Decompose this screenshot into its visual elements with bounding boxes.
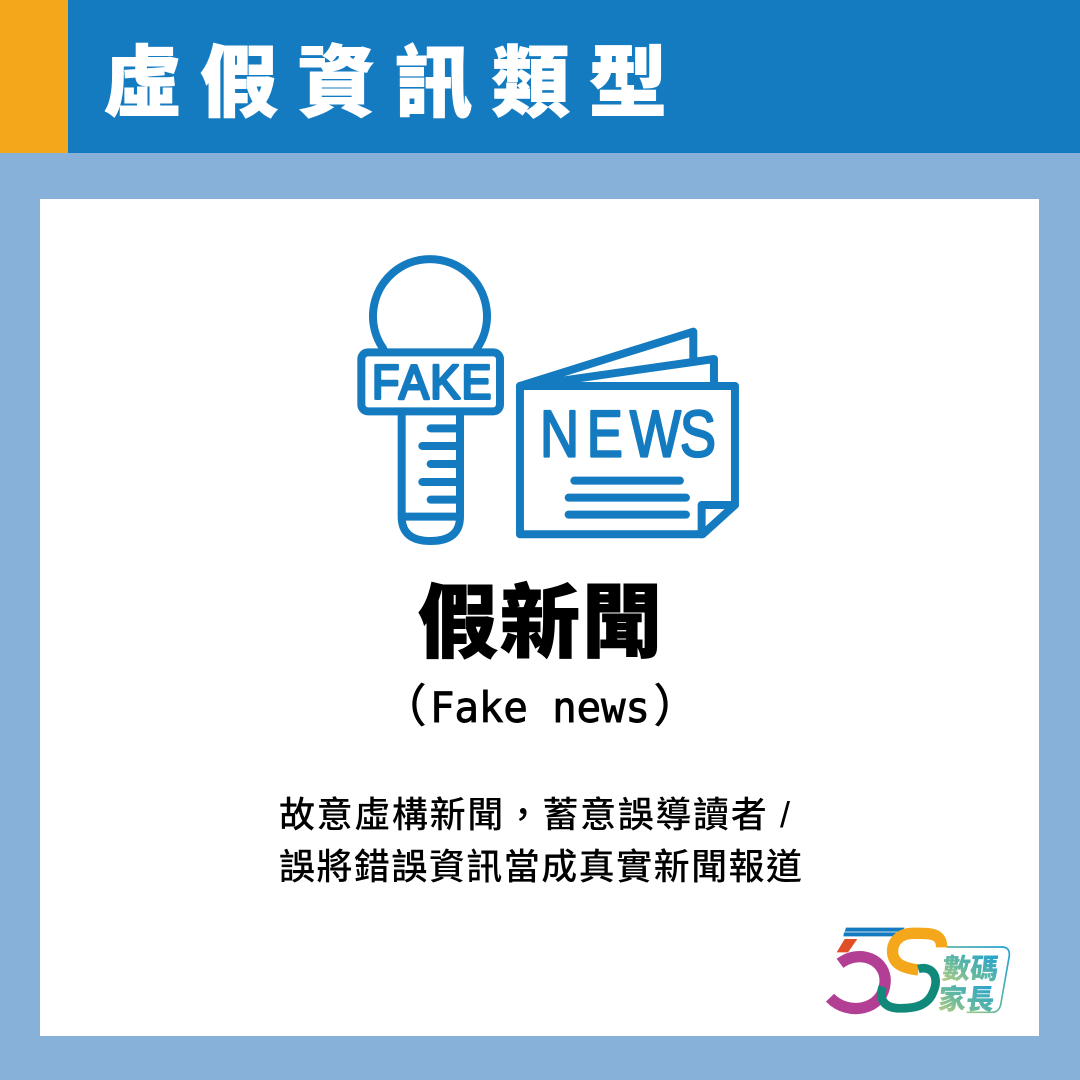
description text (279, 794, 802, 887)
subheading: English term: ） (653, 670, 699, 736)
logo: 55 digital parents: 家長 (937, 983, 996, 1015)
subheading: English term: （ (381, 670, 427, 736)
icon: fake news microphone and newspaper (361, 259, 735, 541)
subheading: English term: Fake news (430, 683, 650, 732)
panel: white content card (40, 199, 1039, 1036)
icon: microphone (361, 259, 500, 541)
title: 虛假資訊類型 (103, 39, 667, 127)
heading: fake news: 假新聞 (418, 579, 662, 668)
description text: 誤將錯誤資訊當成真實新聞報道 (279, 846, 802, 887)
logo: 55 digital parents: 數碼 (941, 953, 1000, 984)
header bar (68, 0, 1080, 153)
icon: microphone: FAKE (372, 355, 491, 409)
description text: 故意虛構新聞，蓄意誤導讀者 / (279, 794, 790, 835)
orange accent block (0, 0, 68, 153)
logo: 55 digital parents (830, 928, 1009, 1015)
subheading: English term (381, 670, 699, 736)
icon: newspaper: NEWS (540, 396, 716, 471)
icon: newspaper (520, 332, 735, 534)
